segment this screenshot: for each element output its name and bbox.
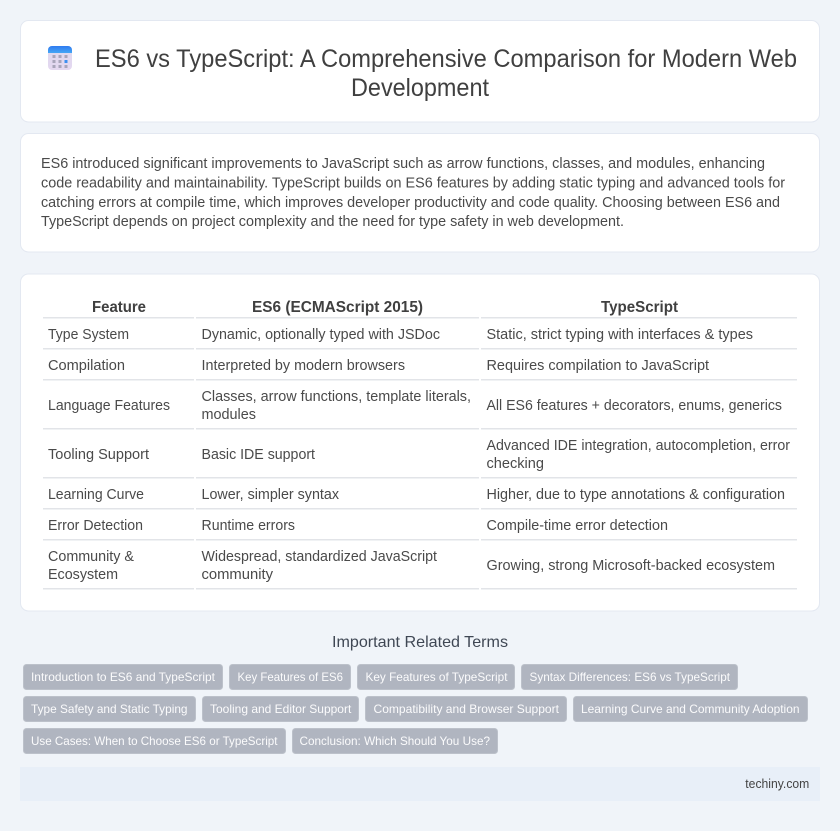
table row: error detection: Error Detection: [48, 518, 143, 534]
tag: tooling and editor support: Tooling and Editor Support: [210, 702, 352, 716]
related terms tags: [24, 664, 808, 754]
title: [95, 45, 797, 102]
title: ES6 vs TypeScript: A Comprehensive Comparison for Modern Web: [95, 45, 797, 73]
tag: key features of ES6: Key Features of ES6: [238, 670, 343, 684]
table row: tooling support: Basic IDE support: [202, 447, 315, 463]
tag: key features of TypeScript: [358, 664, 514, 690]
tag: learning curve: [574, 696, 808, 722]
title: Development: [351, 74, 489, 102]
table row: tooling support: Advanced IDE integration, autocompletion, error: [486, 438, 790, 454]
tag: type safety: [24, 696, 196, 722]
table row: type system: Type System: [48, 327, 129, 343]
tag: compatibility: [366, 696, 566, 722]
table row: tooling support: [43, 438, 797, 478]
tag: conclusion: Conclusion: Which Should You Use?: [300, 734, 490, 748]
table row: error detection: Compile-time error detection: [486, 518, 668, 534]
footer: [20, 767, 820, 801]
tag: key features of ES6: [230, 664, 350, 690]
table row: community and ecosystem: Ecosystem: [48, 567, 118, 583]
tag: syntax differences: Syntax Differences: ES6 vs TypeScript: [530, 670, 731, 684]
tag: use cases: [24, 728, 286, 754]
table row: type system: Static, strict typing with interfaces & types: [486, 327, 753, 343]
icon: calendar: [48, 46, 72, 70]
tag: compatibility: Compatibility and Browser Support: [374, 702, 560, 716]
panel: introduction: [20, 134, 820, 252]
table row: learning curve: [43, 487, 797, 510]
table row: error detection: Runtime errors: [202, 518, 295, 534]
table row: tooling support: checking: [486, 456, 544, 472]
tag: type safety: Type Safety and Static Typing: [31, 702, 188, 716]
text block: introduction paragraph: ES6 introduced significant improvements to JavaScript such as arrow functions, classes, and modules, enhancing: [41, 156, 765, 172]
panel: comparison table: [20, 274, 820, 611]
table row: language features: modules: [202, 407, 256, 423]
table row: compilation: Requires compilation to JavaScript: [486, 358, 709, 374]
table header row: [43, 299, 797, 318]
table row: community and ecosystem: [43, 549, 797, 590]
table header row: TypeScript: [601, 299, 679, 316]
heading: important related terms: Important Related Terms: [332, 634, 508, 651]
tag: key features of TypeScript: Key Features of TypeScript: [366, 670, 508, 684]
table row: error detection: [43, 518, 797, 540]
table row: language features: Classes, arrow functions, template literals,: [202, 389, 471, 405]
table row: type system: Dynamic, optionally typed with JSDoc: [202, 327, 440, 343]
table row: tooling support: Tooling Support: [48, 447, 149, 463]
table row: learning curve: Higher, due to type annotations & configuration: [486, 487, 785, 503]
tag: use cases: Use Cases: When to Choose ES6 or TypeScript: [31, 734, 278, 748]
table row: community and ecosystem: Growing, strong Microsoft-backed ecosystem: [486, 558, 775, 574]
tag: introduction: Introduction to ES6 and TypeScript: [31, 670, 216, 684]
table header row: Feature: [92, 299, 146, 316]
text block: introduction paragraph: catching errors at compile time, which improves developer productivity and code quality. Choosing between ES6 and: [41, 195, 780, 211]
table row: type system: [43, 327, 797, 350]
text block: introduction paragraph: TypeScript depends on project complexity and the need for type safety in web development.: [41, 214, 624, 230]
footer: techiny.com: [745, 777, 809, 791]
text block: introduction paragraph: code readability and maintainability. TypeScript builds on ES6 features by adding static typing and advanced tools for: [41, 176, 785, 192]
table row: community and ecosystem: Community &: [48, 549, 134, 565]
tag: introduction: [24, 664, 222, 690]
tag: conclusion: [292, 728, 498, 754]
table row: learning curve: Learning Curve: [48, 487, 144, 503]
text block: introduction paragraph: [41, 156, 785, 230]
table row: community and ecosystem: Widespread, standardized JavaScript: [202, 549, 437, 565]
tag: learning curve: Learning Curve and Community Adoption: [581, 702, 800, 716]
tag: syntax differences: [522, 664, 738, 690]
table row: learning curve: Lower, simpler syntax: [202, 487, 340, 503]
panel: header: [20, 20, 820, 122]
tag: tooling and editor support: [202, 696, 358, 722]
table row: community and ecosystem: community: [202, 567, 274, 583]
table row: language features: All ES6 features + decorators, enums, generics: [486, 398, 782, 414]
table row: compilation: Compilation: [48, 358, 125, 374]
table header row: ES6 (ECMAScript 2015): [252, 299, 423, 316]
table row: compilation: [43, 358, 797, 380]
table row: language features: [43, 389, 797, 430]
table row: compilation: Interpreted by modern browsers: [202, 358, 405, 374]
table row: language features: Language Features: [48, 398, 170, 414]
